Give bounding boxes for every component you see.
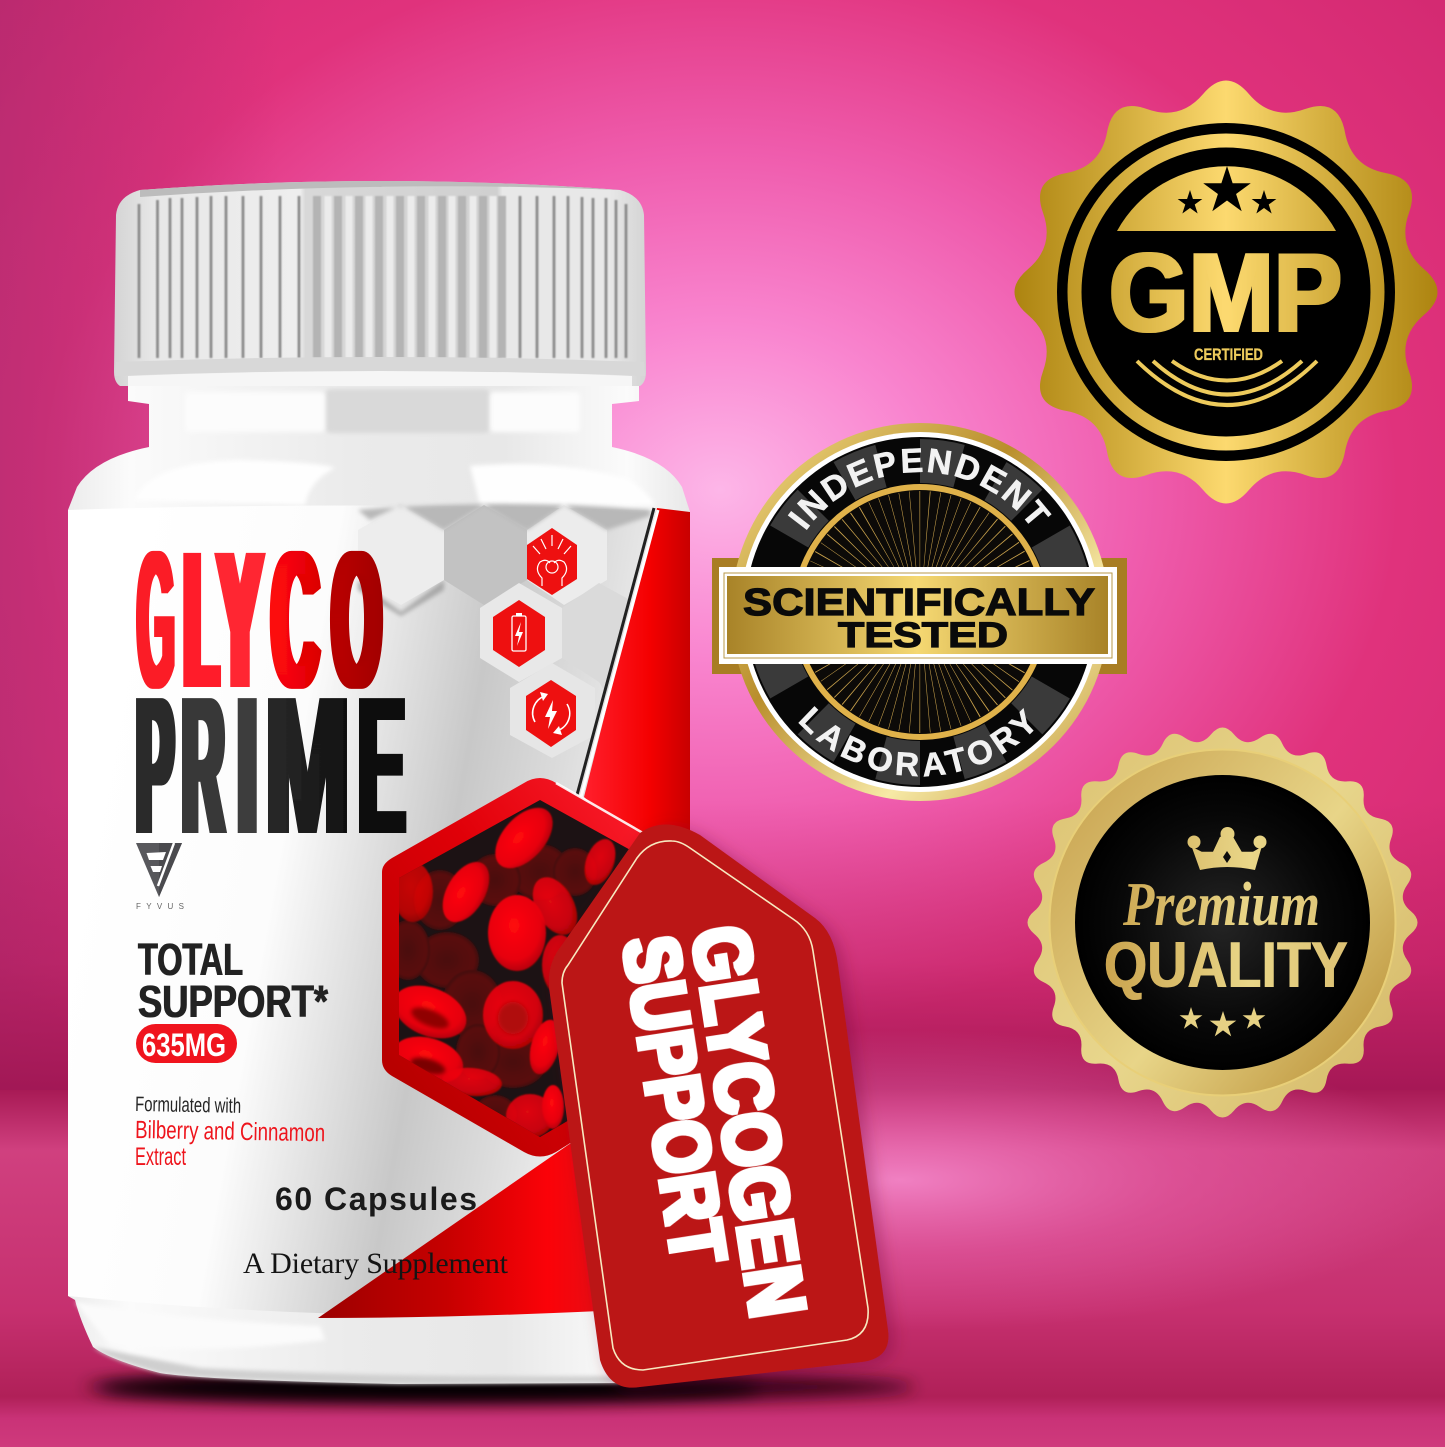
TOTAL SUPPORT heading	[138, 934, 328, 1027]
bright red cells	[399, 806, 616, 1137]
supplement line: A Dietary Supplement	[243, 1247, 509, 1280]
tag stitched border	[562, 841, 868, 1370]
tag text line 1: GLYCOGEN	[675, 920, 823, 1323]
brand name GLYCO	[137, 510, 381, 730]
brand name GLYCO: G	[137, 511, 175, 730]
floor shadow under bottle	[85, 1373, 915, 1401]
badge: GMP certified	[1014, 80, 1438, 504]
gold banner	[719, 567, 1117, 664]
red diagonal corner	[318, 1118, 612, 1318]
capsule count: 60 Capsules	[275, 1181, 477, 1217]
bottle cap	[114, 181, 646, 386]
635MG pill: 635MG	[142, 1027, 226, 1063]
FYVUS logo	[136, 843, 184, 911]
brand name GLYCO: C	[272, 511, 318, 729]
brand name PRIME	[136, 655, 405, 876]
brand name GLYCO: O	[332, 511, 381, 729]
CERTIFIED text: CERTIFIED	[1194, 345, 1263, 364]
FYVUS logo: FYVUS	[136, 902, 184, 911]
badge: premium quality	[1028, 727, 1418, 1118]
formula description: Extract	[135, 1143, 186, 1171]
icon: crown	[1188, 827, 1266, 870]
brand name GLYCO: Y	[218, 510, 262, 729]
TOTAL SUPPORT heading: SUPPORT*	[138, 976, 328, 1027]
icon: energy cycle	[526, 680, 576, 747]
product bottle	[68, 181, 700, 1384]
SCIENTIFICALLY TESTED text: TESTED	[838, 616, 1008, 655]
three gold stars	[1180, 1007, 1265, 1036]
GMP rings	[1057, 123, 1395, 461]
LABORATORY arc text: LABORATORY	[798, 706, 1034, 777]
formula description	[135, 1093, 325, 1171]
Premium script: Premium	[1122, 871, 1320, 939]
gold ring	[1050, 750, 1396, 1096]
TOTAL SUPPORT heading: TOTAL	[138, 934, 243, 985]
brand name PRIME: M	[265, 657, 350, 876]
blood cell hexagon	[382, 778, 643, 1156]
brand name PRIME: R	[182, 655, 224, 875]
lab seal rings	[731, 423, 1109, 801]
bottle body	[68, 384, 690, 1384]
INDEPENDENT arc text: INDEPENDENT	[788, 448, 1052, 530]
brand name PRIME: I	[237, 655, 258, 875]
badge: scientifically tested	[712, 423, 1127, 801]
brand name PRIME: E	[358, 657, 405, 876]
brand name PRIME: P	[136, 656, 174, 875]
product label	[68, 505, 690, 1315]
GMP wordmark: GMP	[1109, 231, 1342, 355]
SCIENTIFICALLY TESTED text: SCIENTIFICALLY	[743, 582, 1095, 624]
honeycomb hexagon pattern	[358, 504, 650, 758]
SCIENTIFICALLY TESTED text	[743, 582, 1095, 655]
banner back tabs	[712, 558, 1127, 674]
tag text line 2: SUPPORT	[606, 930, 744, 1270]
dim background cells	[399, 844, 594, 1122]
formula description: Formulated with	[135, 1093, 241, 1118]
QUALITY wordmark: QUALITY	[1104, 928, 1348, 1001]
icon: hands and burst	[527, 528, 577, 595]
GMP dome with stars	[1117, 166, 1336, 231]
scalloped gold edge	[1028, 727, 1418, 1118]
tag body	[549, 824, 888, 1388]
glycogen support tag	[549, 824, 888, 1388]
GMP scalloped seal	[1014, 80, 1438, 504]
formula description: Bilberry and Cinnamon	[135, 1116, 325, 1147]
red swoosh panel	[577, 508, 690, 870]
bottle gloss highlights	[75, 389, 655, 1384]
brand name GLYCO: L	[185, 511, 218, 729]
GMP arcs	[1137, 361, 1317, 405]
icon: battery with bolt	[493, 600, 545, 667]
